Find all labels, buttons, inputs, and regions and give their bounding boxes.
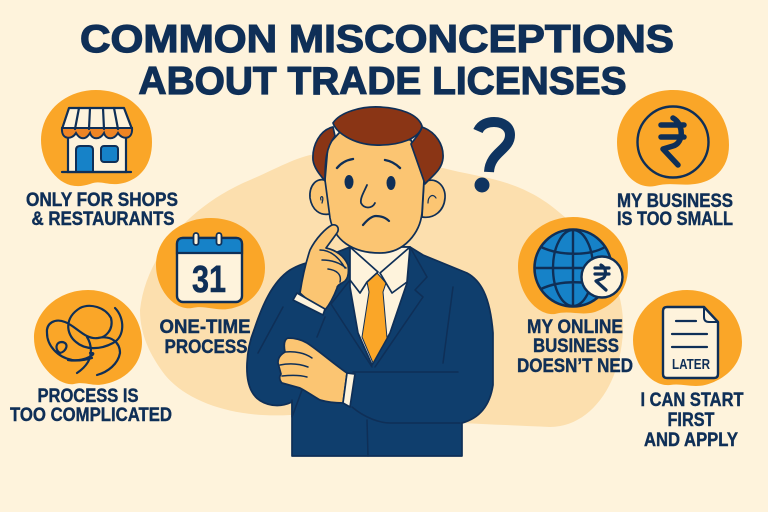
side hair right	[411, 127, 443, 184]
eyes	[344, 175, 396, 190]
icon blob: rupee	[617, 90, 729, 187]
label: PROCESS IS	[38, 385, 138, 407]
jacket	[247, 247, 493, 456]
label: MY BUSINESS	[617, 190, 733, 212]
icon: rupee coin	[638, 106, 708, 178]
jacket seams	[258, 247, 460, 456]
background blob	[140, 154, 623, 427]
top hair	[333, 107, 422, 145]
left ear	[310, 180, 330, 214]
label: ONE-TIME	[160, 316, 250, 338]
icon: shop	[62, 108, 132, 172]
icon: document later	[663, 307, 718, 378]
finger lines	[320, 250, 346, 282]
label: ONLY FOR SHOPS	[26, 189, 178, 211]
title	[80, 18, 674, 103]
cuff	[293, 293, 325, 315]
icon blob: document	[633, 290, 742, 386]
eyebrows	[337, 159, 400, 168]
item: my online business doesn't need	[517, 217, 633, 377]
icon: tangle	[47, 306, 122, 375]
icon: calendar: 31	[192, 259, 226, 301]
item: one-time process	[156, 218, 265, 358]
title: ABOUT TRADE LICENSES	[138, 60, 626, 103]
nose	[361, 185, 375, 208]
collar	[350, 247, 410, 293]
shirt	[350, 247, 410, 365]
face	[325, 132, 424, 253]
question mark	[478, 122, 510, 172]
item: process is too complicated	[10, 290, 172, 426]
item: my online business doesn't need: BUSINESS	[533, 335, 619, 357]
side hair left	[313, 127, 335, 181]
item: my business is too small	[617, 90, 733, 230]
icon blob: shop	[41, 90, 152, 186]
lower finger lines	[280, 352, 312, 377]
tie	[362, 273, 387, 363]
icon blob: tangle	[34, 290, 142, 385]
item: i can start first and apply	[633, 290, 744, 451]
left ear detail	[321, 197, 323, 203]
thinking hand	[300, 225, 348, 310]
item: only for shops	[26, 90, 178, 230]
item: my business is too small: IS TOO SMALL	[617, 208, 733, 230]
item: my online business doesn't need: DOESN’T NED	[517, 355, 633, 377]
icon blob: calendar	[156, 218, 265, 309]
man figure	[247, 107, 493, 456]
right ear	[422, 180, 445, 217]
lower cuff	[343, 373, 355, 407]
mouth	[363, 216, 389, 225]
lower hand	[278, 338, 347, 403]
item: only for shops: & RESTAURANTS	[32, 208, 174, 230]
item: process is too complicated: TOO COMPLICATED	[10, 404, 172, 426]
item: i can start first and apply: FIRST	[668, 409, 715, 431]
icon blob: globe	[518, 217, 628, 314]
icon: document later: LATER	[672, 356, 710, 373]
item: one-time process: PROCESS	[164, 336, 248, 358]
icon: globe	[534, 230, 622, 306]
label: I CAN START	[640, 389, 744, 411]
label: MY ONLINE	[527, 316, 623, 338]
item: i can start first and apply: AND APPLY	[644, 429, 738, 451]
title: COMMON MISCONCEPTIONS	[80, 18, 674, 61]
question mark dot	[474, 178, 490, 192]
right ear detail	[428, 196, 436, 203]
